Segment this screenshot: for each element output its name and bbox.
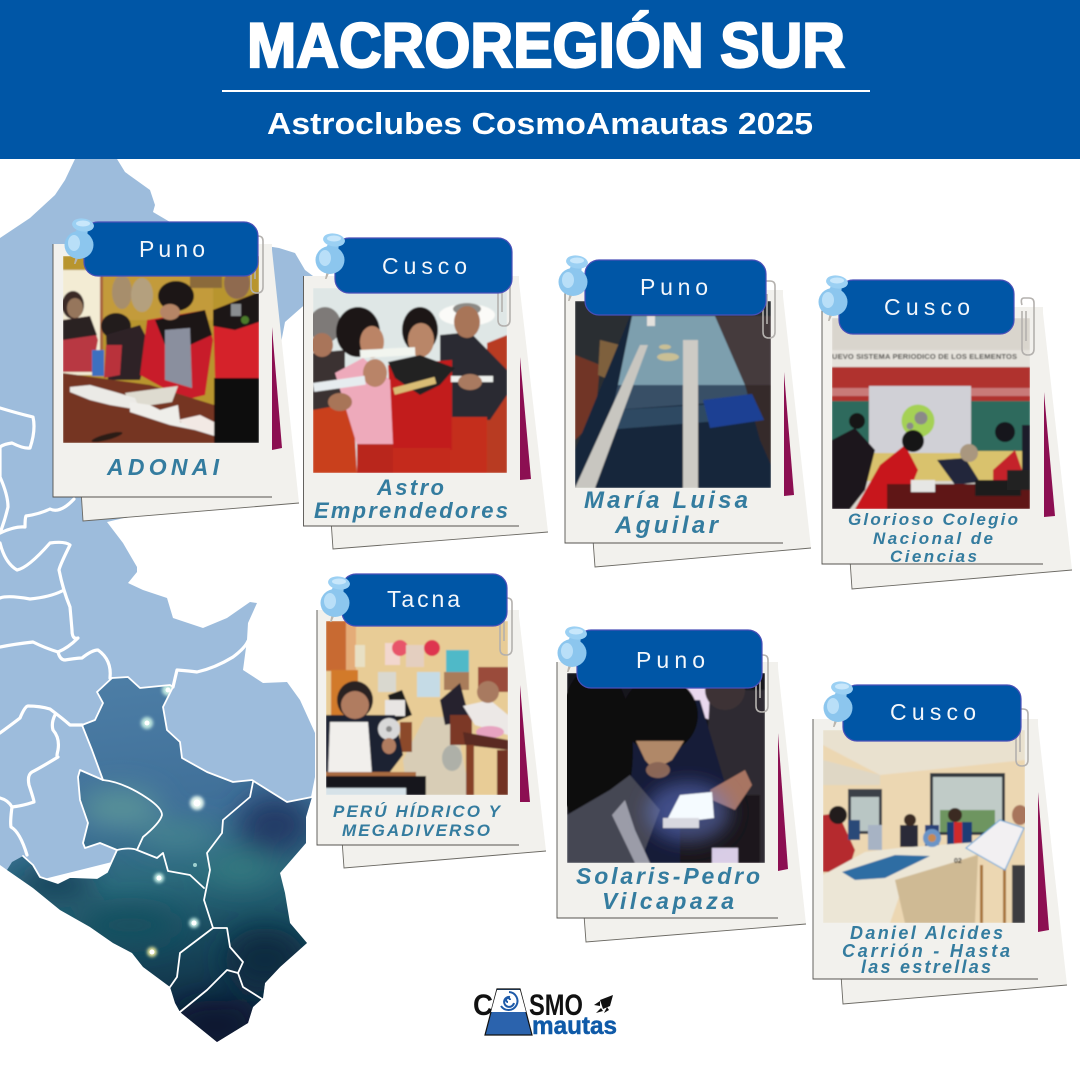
caption: Astro — [376, 475, 444, 500]
CosmoAmautas logo: SMO — [529, 989, 583, 1022]
push pin — [320, 575, 351, 622]
tag label: Cusco — [382, 253, 467, 279]
caption: las estrellas — [861, 957, 991, 977]
caption: Aguilar — [614, 512, 720, 539]
photo: long table with paper strips — [575, 301, 771, 488]
paperclip — [755, 655, 768, 712]
caption: María Luisa — [584, 487, 748, 514]
magenta strip — [1044, 392, 1055, 517]
card: Glorioso Colegio Nacional de Ciencias, Cusco — [818, 274, 1072, 589]
paperclip — [499, 598, 512, 655]
map: southern macro-region with nebula texture — [0, 670, 320, 1050]
caption: Emprendedores — [314, 498, 508, 523]
tag label: Cusco — [890, 699, 976, 725]
CosmoAmautas logo: mautas — [532, 1012, 617, 1040]
push pin — [824, 680, 854, 727]
caption — [848, 510, 1018, 566]
CosmoAmautas logo — [473, 989, 617, 1040]
caption: Nacional de — [873, 529, 993, 548]
tag label: Puno — [640, 274, 708, 300]
region tag — [84, 222, 258, 276]
CosmoAmautas logo: C — [473, 989, 493, 1022]
caption — [333, 802, 502, 840]
push pin — [558, 625, 588, 672]
region tag — [342, 574, 507, 626]
card: Astro Emprendedores, Cusco — [304, 232, 548, 549]
caption: Solaris-Pedro — [576, 863, 760, 889]
photo: classroom projection — [832, 318, 1030, 509]
paperclip — [1021, 298, 1034, 355]
photo: science laboratory: 02 — [954, 858, 962, 865]
peru map — [0, 159, 325, 1050]
caption — [576, 863, 760, 914]
back sheet — [331, 282, 548, 549]
card: Daniel Alcides Carrión, Cusco — [813, 680, 1067, 1004]
paperclip — [1015, 709, 1028, 766]
push pin — [818, 274, 849, 321]
paperclip — [497, 269, 510, 326]
front sheet — [304, 276, 519, 526]
caption — [842, 923, 1010, 977]
card: Solaris-Pedro Vilcapaza, Puno — [557, 625, 806, 942]
logo: rocket — [594, 995, 613, 1013]
tag label: Tacna — [387, 586, 460, 612]
photo: children holding rulers — [309, 288, 507, 473]
map: southern department borders — [23, 677, 312, 1012]
back sheet — [342, 616, 546, 868]
card: María Luisa Aguilar, Puno — [558, 254, 811, 567]
front sheet — [813, 719, 1038, 979]
paperclip — [762, 281, 775, 338]
front sheet — [565, 290, 783, 543]
photo: students with paper models — [62, 256, 259, 444]
stars — [141, 684, 204, 957]
tag label: Puno — [139, 236, 205, 262]
front sheet — [822, 307, 1043, 564]
subtitle: Astroclubes CosmoAmautas 2025 — [267, 106, 813, 141]
caption: Ciencias — [890, 547, 977, 566]
photo: students around a lit device — [557, 665, 765, 863]
tag label: Puno — [636, 647, 705, 673]
caption — [584, 487, 748, 539]
divider line — [222, 90, 870, 92]
caption: Vilcapaza — [602, 888, 734, 914]
back sheet — [850, 313, 1072, 589]
tag label: Cusco — [884, 294, 970, 320]
back sheet — [593, 296, 811, 567]
front sheet — [53, 244, 272, 497]
caption: Daniel Alcides — [850, 923, 1003, 943]
caption: Glorioso Colegio — [848, 510, 1018, 529]
magenta strip — [272, 327, 282, 450]
push pin — [316, 232, 346, 279]
region tag — [839, 280, 1014, 334]
push pin — [558, 254, 589, 301]
map base: light blue territory — [0, 159, 325, 880]
paperclip — [250, 236, 263, 293]
caption: MEGADIVERSO — [342, 821, 490, 840]
magenta strip — [520, 685, 530, 802]
magenta strip — [784, 372, 794, 496]
region tag — [843, 685, 1021, 741]
front sheet — [317, 610, 519, 845]
logo: stone trapezoid with swirl — [485, 989, 532, 1035]
region tag — [335, 238, 512, 293]
title: MACROREGIÓN SUR — [247, 11, 845, 81]
caption: PERÚ HÍDRICO Y — [333, 802, 502, 821]
push pin — [64, 217, 95, 264]
header band — [0, 0, 1080, 159]
magenta strip — [778, 733, 788, 871]
front sheet — [557, 662, 778, 918]
card: ADONAI, Puno — [53, 217, 299, 521]
magenta strip — [520, 357, 531, 480]
back sheet — [81, 250, 299, 521]
back sheet — [841, 725, 1067, 1004]
caption: Carrión - Hasta — [842, 941, 1010, 961]
card: Perú Hídrico y Megadiverso, Tacna — [317, 574, 546, 868]
photo: classroom with student and CD — [326, 621, 508, 795]
region tag — [585, 260, 766, 315]
photo: science laboratory — [823, 730, 1028, 923]
region tag — [577, 630, 762, 688]
magenta strip — [1038, 792, 1049, 932]
back sheet — [584, 668, 806, 942]
caption — [314, 475, 508, 523]
caption: ADONAI — [106, 454, 220, 480]
map: upper department borders — [0, 408, 248, 855]
photo: classroom projection: UEVO SISTEMA PERIODICO DE LOS ELEMENTOS — [832, 352, 1017, 361]
